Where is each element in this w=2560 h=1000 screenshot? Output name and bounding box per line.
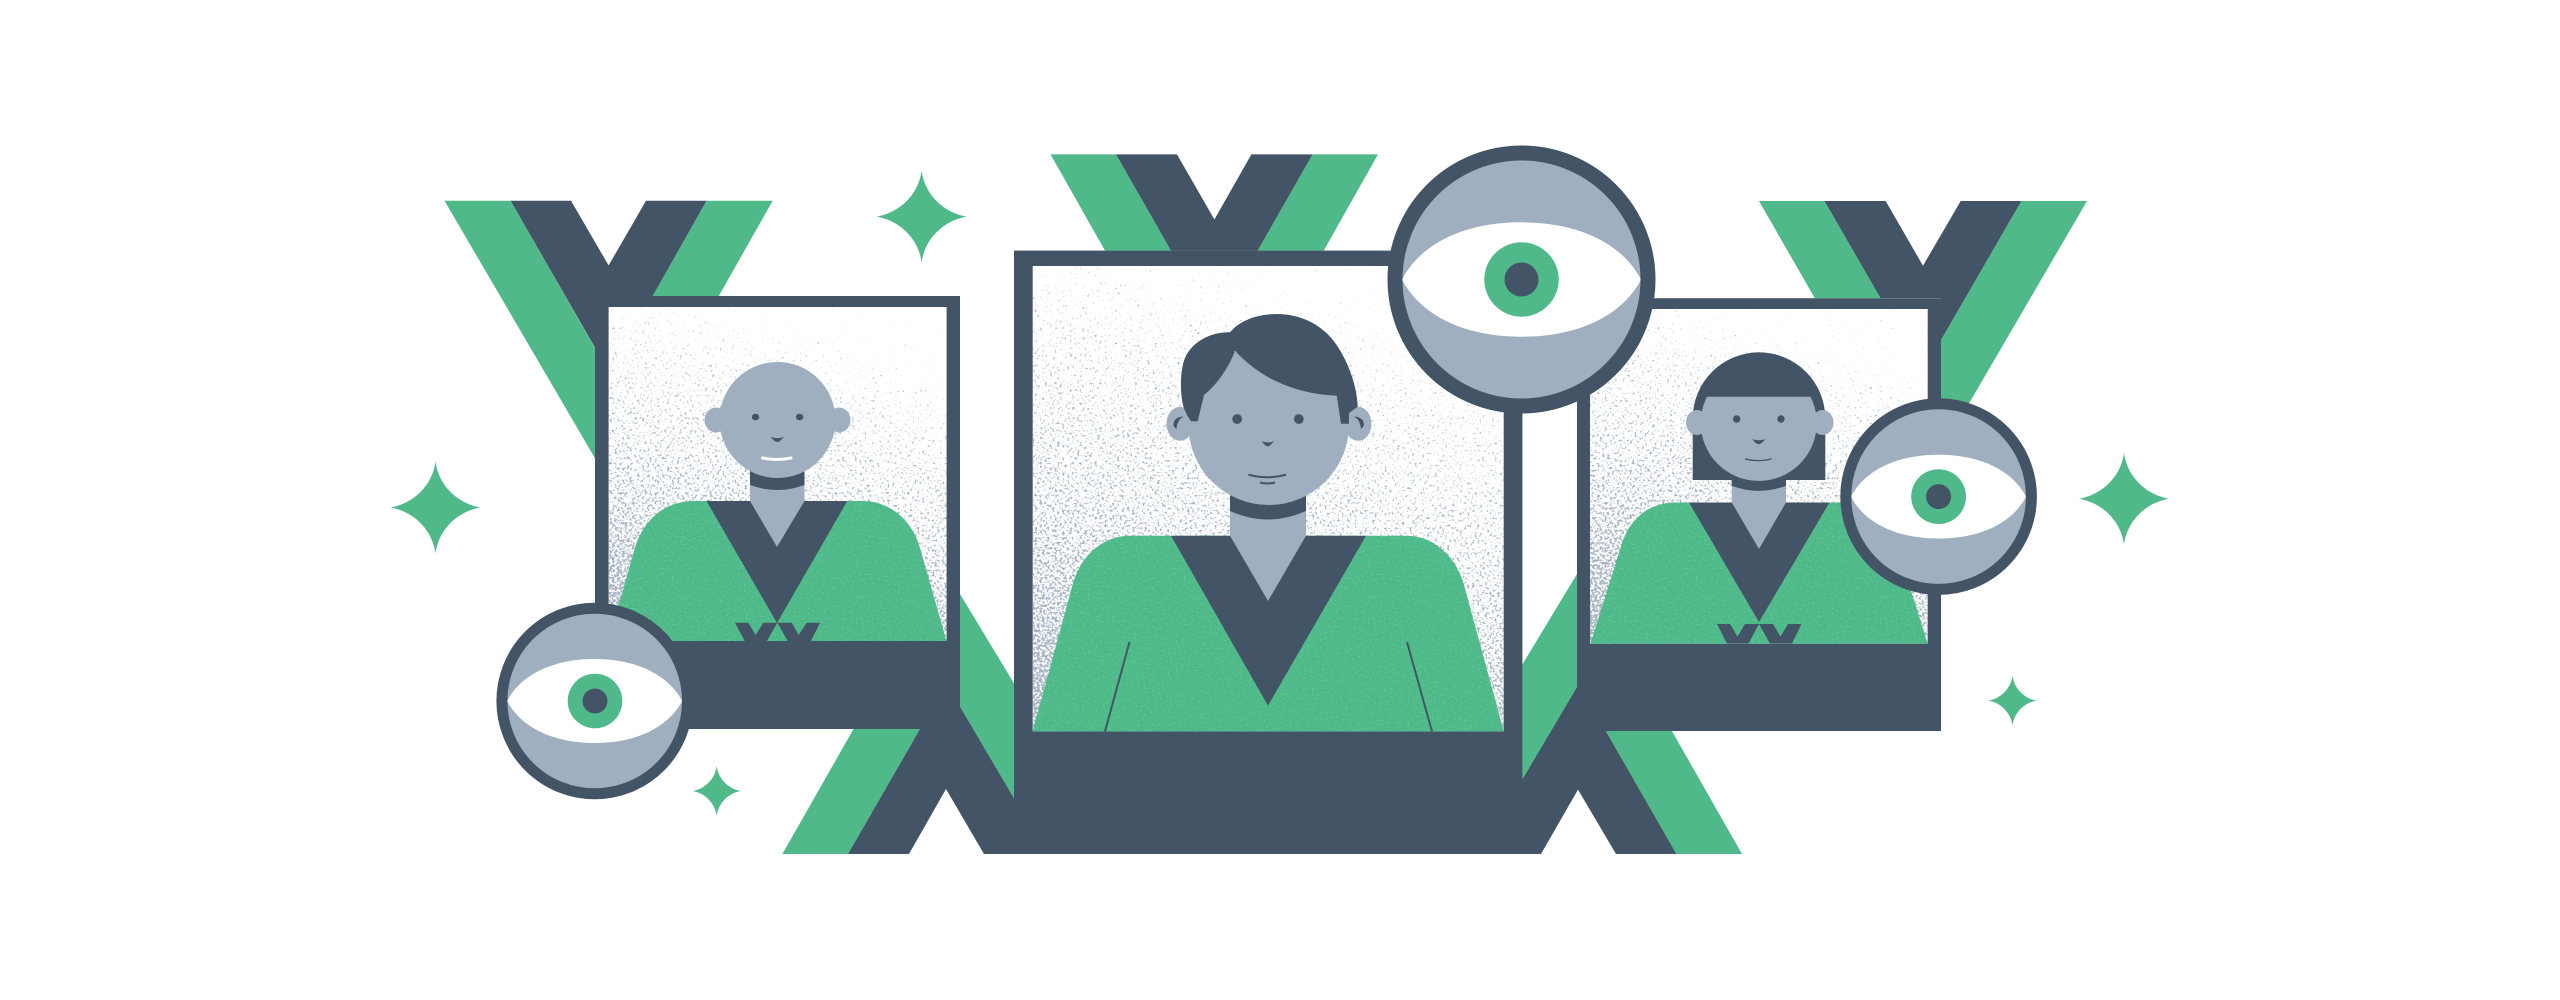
neck [750,470,804,547]
person: right, bob hair [1590,352,1928,644]
panel: right portrait frame [1577,298,1941,731]
choker [750,465,804,490]
hair [1693,352,1825,480]
eye white [507,659,682,743]
eye left [1733,415,1740,423]
pupil [582,688,608,714]
mouth [1248,475,1286,477]
icon: sparkle left [390,462,480,554]
mouth [1745,459,1772,461]
lens ring [1846,404,2031,589]
logo: right bottom V [1522,574,1742,854]
nose [1262,441,1274,446]
choker [1230,488,1306,520]
neck [1732,470,1786,549]
head [1188,344,1349,505]
body [1033,536,1504,731]
logo: centre top V [1050,154,1378,251]
lens ring [502,608,688,794]
panel: left portrait frame [595,296,960,729]
pupil [1504,262,1538,296]
mouth [762,458,791,460]
choker [1732,465,1786,491]
logo: left top V [444,201,773,460]
eye white [1402,222,1641,337]
eye right [1294,414,1304,424]
icon: right eye lens [1846,404,2031,589]
left ear [1686,410,1708,435]
left ear inner [1173,416,1184,429]
body [609,501,946,641]
collar [706,501,847,623]
person: centre, short hair [1033,314,1504,731]
collar [1689,502,1830,622]
iris [1484,242,1559,317]
right ear [1812,410,1834,435]
left ear [704,408,728,432]
eye right [796,414,803,420]
neck [1230,490,1306,601]
icon: centre eye lens [1395,153,1648,406]
eye left [1232,414,1242,424]
person: left, bald [609,362,946,642]
eye white [1851,455,2026,538]
logo: left bottom V [782,594,1015,854]
arm line right [1407,642,1432,731]
logo: right top V [1759,201,2087,452]
iris [1911,469,1966,524]
icon: sparkle right [2079,453,2169,545]
icon: sparkle bottom right [1988,676,2036,726]
eye left [752,414,759,420]
hair [1181,314,1358,424]
icon: sparkle top [877,171,967,263]
shirt logo [1717,624,1759,644]
nose [1752,439,1766,444]
shirt logo right [777,623,820,642]
right ear inner [1354,416,1364,429]
pupil [1926,484,1951,509]
arm line left [1105,642,1130,731]
body [1590,502,1928,644]
icon: left eye lens [502,608,688,794]
right ear [1344,407,1372,441]
iris [568,674,622,728]
eye right [1777,415,1785,423]
icon: sparkle bottom left [693,766,741,816]
panel: centre portrait frame [1014,251,1522,854]
head [1701,397,1817,481]
shirt logo [735,623,777,642]
chin line [1260,482,1275,484]
lens ring [1395,153,1648,406]
collar [1171,536,1366,706]
head [720,362,836,478]
shirt logo right [1759,624,1802,644]
nose [771,437,784,442]
left ear [1166,407,1194,441]
right ear [828,408,850,432]
